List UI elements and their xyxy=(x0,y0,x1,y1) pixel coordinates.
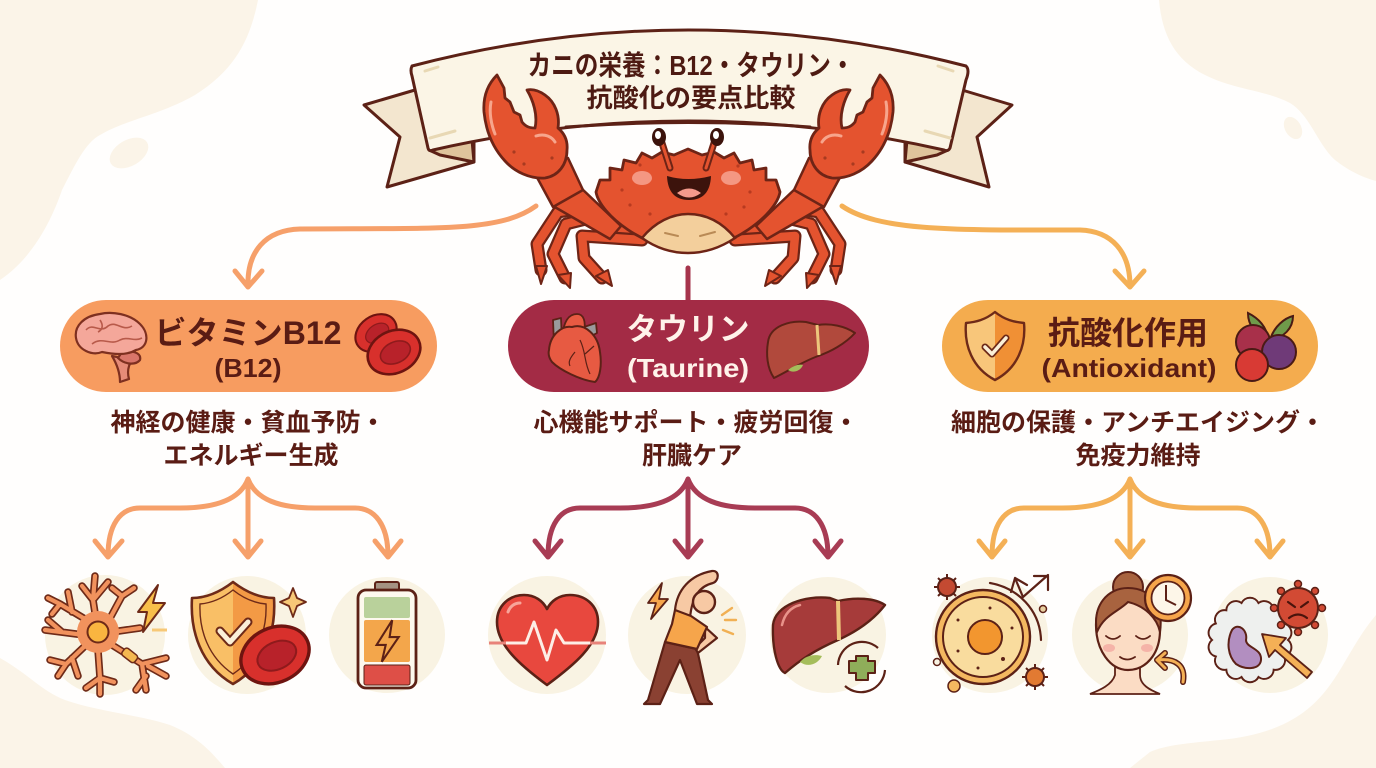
arrow: to vitamin B12 xyxy=(235,206,536,287)
subtitle: (B12) xyxy=(214,353,282,383)
icon: neuron xyxy=(45,575,167,695)
pill heading xyxy=(942,300,1318,392)
icon: berries xyxy=(1236,313,1296,381)
icon: face with clock xyxy=(1072,572,1191,694)
icon: shield xyxy=(966,312,1024,380)
icon: liver with plus xyxy=(770,577,886,693)
arrows: three branches xyxy=(979,479,1283,557)
icon: liver xyxy=(767,322,855,378)
title text: カニの栄養：B12・タウリン・ xyxy=(528,50,854,81)
small particles xyxy=(934,574,1048,690)
arrows: three branches xyxy=(535,479,841,557)
panel: taurine xyxy=(488,300,886,704)
arrows: three branches xyxy=(95,479,401,557)
icon: brain xyxy=(76,313,146,382)
description: 心機能サポート・疲労回復・ xyxy=(533,409,859,437)
eye stalks xyxy=(661,140,715,168)
title text: 抗酸化の要点比較 xyxy=(586,83,796,113)
arrow: to taurine xyxy=(686,268,690,302)
subtitle: (Antioxidant) xyxy=(1042,353,1216,383)
description xyxy=(951,408,1325,470)
icon: heart with pulse xyxy=(488,576,606,694)
description xyxy=(533,409,859,470)
title text xyxy=(528,50,854,113)
icon: immune cell and virus xyxy=(1209,577,1328,693)
pill heading xyxy=(60,300,437,392)
icon: protected cell xyxy=(932,574,1048,693)
description xyxy=(110,409,386,470)
title: taurine: タウリン xyxy=(626,312,750,347)
connector arrows from crab xyxy=(235,206,1144,302)
title: vitamin B12: ビタミンB12 xyxy=(154,315,342,351)
description: 細胞の保護・アンチエイジング・ xyxy=(951,408,1325,437)
panel: antioxidant xyxy=(932,300,1328,694)
panel: vitamin B12 xyxy=(45,300,445,695)
icon: stretching person xyxy=(628,571,746,704)
description: 神経の健康・貧血予防・ xyxy=(110,409,386,437)
crab mascot xyxy=(484,75,893,288)
icon: battery xyxy=(329,577,445,693)
description: 免疫力維持 xyxy=(1075,442,1201,470)
description: 肝臓ケア xyxy=(642,442,742,470)
subtitle: (Taurine) xyxy=(627,353,749,383)
icon: heart organ xyxy=(549,314,601,382)
icon: red blood cells xyxy=(348,306,428,383)
arrow: to antioxidant xyxy=(842,206,1144,287)
description: エネルギー生成 xyxy=(163,442,339,470)
face xyxy=(632,171,652,185)
shell xyxy=(596,149,780,250)
belly xyxy=(642,214,735,253)
icon: shield and blood cell xyxy=(188,576,319,695)
title banner xyxy=(364,30,1012,187)
pill heading xyxy=(508,300,869,392)
title: antioxidant: 抗酸化作用 xyxy=(1048,315,1208,351)
